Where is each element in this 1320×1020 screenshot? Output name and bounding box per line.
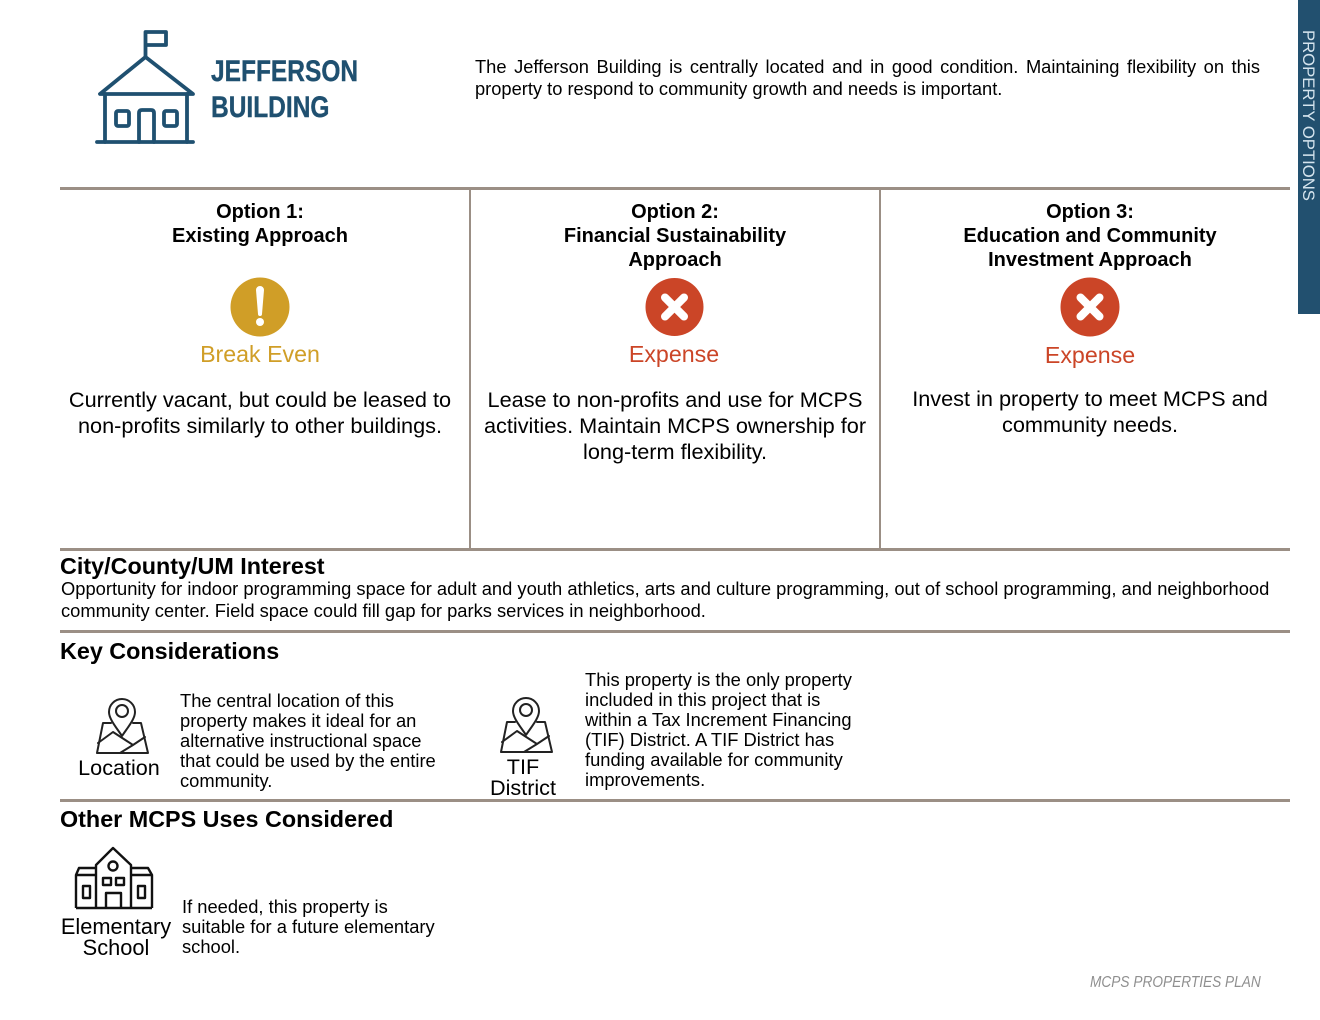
label: elementary school: School xyxy=(83,935,149,960)
location text: alternative instructional space xyxy=(180,730,421,751)
icon: x mark xyxy=(1060,278,1120,336)
panel: option 3 xyxy=(912,201,1268,437)
sidebar tab: property options xyxy=(1298,0,1320,314)
location text xyxy=(180,690,436,791)
option 1 heading xyxy=(172,201,348,247)
option 3 heading: Option 3: xyxy=(1046,201,1134,223)
section rule xyxy=(60,630,1290,633)
title xyxy=(211,55,358,124)
footer: MCPS PROPERTIES PLAN xyxy=(1090,974,1261,991)
icon: location map xyxy=(96,698,149,754)
tif text: within a Tax Increment Financing xyxy=(585,709,852,730)
option 3 heading: Education and Community xyxy=(963,225,1217,247)
elementary text: If needed, this property is xyxy=(182,896,388,917)
label: elementary school: Elementary xyxy=(61,914,171,939)
options table top rule xyxy=(60,187,1290,190)
option 2 heading xyxy=(564,201,786,271)
label: location: Location xyxy=(78,755,160,780)
elementary text xyxy=(182,896,435,957)
tif text: funding available for community xyxy=(585,749,843,770)
option 1 description: non-profits similarly to other buildings. xyxy=(78,413,442,438)
icon: tif district map xyxy=(500,697,553,753)
option 2 heading: Approach xyxy=(628,249,722,271)
option 1 heading: Existing Approach xyxy=(172,225,348,247)
option 3 description xyxy=(912,386,1268,437)
option 1 description xyxy=(69,387,451,438)
status: expense: Expense xyxy=(629,341,719,367)
intro text: property to respond to community growth and needs is important. xyxy=(475,78,1002,99)
tif text: included in this project that is xyxy=(585,689,820,710)
interest text xyxy=(61,578,1269,621)
column divider 1 xyxy=(469,188,471,549)
tif text: This property is the only property xyxy=(585,669,852,690)
icon: schoolhouse with flag xyxy=(95,30,195,144)
option 3 description: community needs. xyxy=(1002,412,1178,437)
sidebar label: PROPERTY OPTIONS xyxy=(1299,30,1318,201)
intro text xyxy=(475,56,1260,99)
title: BUILDING xyxy=(211,91,329,124)
option 2 description: Lease to non-profits and use for MCPS xyxy=(488,387,862,412)
section rule xyxy=(60,548,1290,551)
elementary text: suitable for a future elementary xyxy=(182,916,435,937)
option 3 heading xyxy=(963,201,1217,271)
intro text: The Jefferson Building is centrally located and in good condition. Maintaining flexibility on this xyxy=(475,56,1260,77)
location text: community. xyxy=(180,770,272,791)
option 1 description: Currently vacant, but could be leased to xyxy=(69,387,451,412)
option 2 heading: Financial Sustainability xyxy=(564,225,786,247)
interest text: Opportunity for indoor programming space for adult and youth athletics, arts and culture programming, out of school programming, and neighborhood xyxy=(61,578,1269,599)
column divider 2 xyxy=(879,188,881,549)
tif text: (TIF) District. A TIF District has xyxy=(585,729,834,750)
icon: elementary school xyxy=(74,846,154,910)
panel: option 1 xyxy=(69,201,451,438)
location text: property makes it ideal for an xyxy=(180,710,416,731)
option 3 description: Invest in property to meet MCPS and xyxy=(912,386,1268,411)
option 2 heading: Option 2: xyxy=(631,201,719,223)
title: JEFFERSON xyxy=(211,55,358,88)
heading: key considerations: Key Considerations xyxy=(60,638,279,664)
tif text: improvements. xyxy=(585,769,705,790)
option 3 heading: Investment Approach xyxy=(988,249,1192,271)
label: tif district: TIF xyxy=(507,754,539,779)
label: elementary school xyxy=(61,914,172,960)
section rule xyxy=(60,799,1290,802)
icon: x mark xyxy=(646,278,704,336)
location text: The central location of this xyxy=(180,690,394,711)
option 1 heading: Option 1: xyxy=(216,201,304,223)
tif text xyxy=(585,669,852,790)
location text: that could be used by the entire xyxy=(180,750,436,771)
icon: exclamation xyxy=(230,278,290,336)
option 2 description: long-term flexibility. xyxy=(583,439,767,464)
status: expense: Expense xyxy=(1045,342,1135,368)
heading: other mcps uses considered: Other MCPS Uses Considered xyxy=(60,806,393,832)
status: break even: Break Even xyxy=(200,341,320,367)
panel: option 2 xyxy=(484,201,866,464)
interest text: community center. Field space could fill gap for parks services in neighborhood. xyxy=(61,600,706,621)
option 2 description: activities. Maintain MCPS ownership for xyxy=(484,413,866,438)
elementary text: school. xyxy=(182,936,240,957)
label: tif district xyxy=(490,754,556,800)
option 2 description xyxy=(484,387,866,464)
label: tif district: District xyxy=(490,775,556,800)
heading: city county um interest: City/County/UM Interest xyxy=(60,553,325,579)
